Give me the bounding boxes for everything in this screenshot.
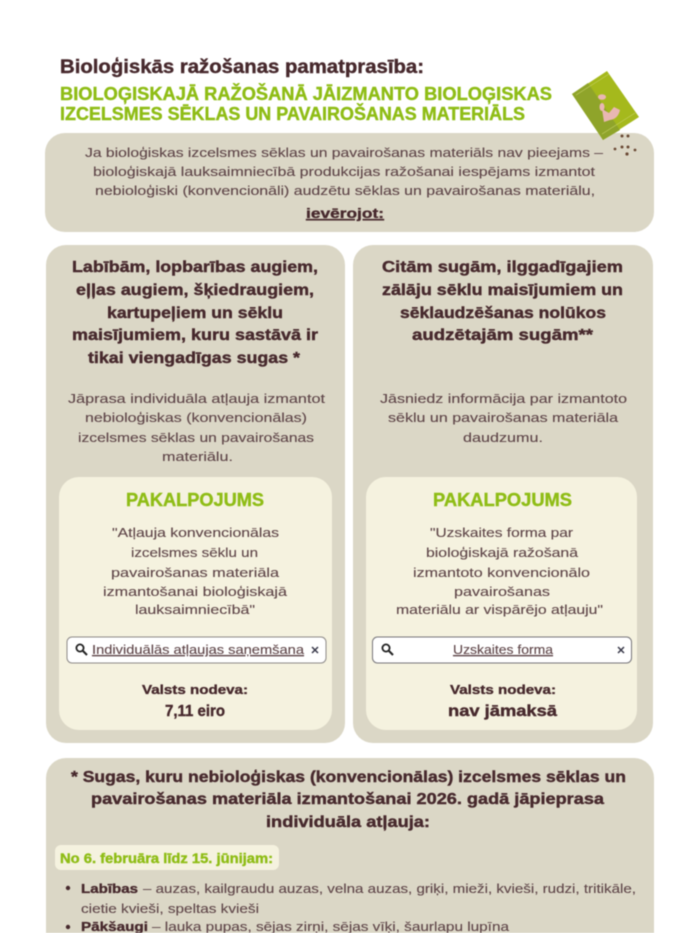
service name: lauksaimniecībā" xyxy=(135,602,255,617)
state fee: right: Valsts nodeva: xyxy=(450,682,556,697)
text: right column requirement: daudzumu. xyxy=(463,430,543,445)
service name: "Uzskaites forma par xyxy=(430,525,574,540)
search box: record form xyxy=(372,637,632,663)
state fee: left xyxy=(142,682,248,720)
heading: left column xyxy=(72,259,318,367)
heading: species: * Sugas, kuru nebioloģiskas (konvencionālas) izcelsmes sēklas un xyxy=(71,769,626,786)
heading: right column: sēklaudzēšanas nolūkos xyxy=(400,305,606,322)
icon: seed packet xyxy=(572,71,639,156)
state fee: right: nav jāmaksā xyxy=(448,703,557,720)
panel: intro: Ja bioloģiskas izcelsmes sēklas un pavairošanas materiāls nav pieejams – xyxy=(85,145,604,160)
search box: record form: Uzskaites forma xyxy=(453,642,554,657)
panel: right column xyxy=(353,245,653,743)
service name: izmantošanai bioloģiskajā xyxy=(103,584,288,599)
service name: pavairošanas materiāla xyxy=(111,565,280,580)
text: left column requirement: Jāprasa individuāla atļauja izmantot xyxy=(68,391,325,406)
search box: individual permit: Individuālās atļaujas saņemšana xyxy=(92,642,305,657)
panel: intro xyxy=(45,133,654,232)
card: left service xyxy=(59,477,332,730)
panel: left column xyxy=(46,245,345,743)
state fee: left: Valsts nodeva: xyxy=(142,682,248,697)
service name xyxy=(396,525,603,617)
heading: species: pavairošanas materiāla izmantošanai 2026. gadā jāpieprasa xyxy=(91,791,604,808)
service label: PAKALPOJUMS xyxy=(433,490,572,510)
state fee: right xyxy=(448,682,557,720)
page title: Bioloģiskās ražošanas pamatprasība: xyxy=(60,57,424,78)
heading: left column: Labībām, lopbarības augiem, xyxy=(72,259,318,276)
service name xyxy=(103,525,288,617)
panel: species list xyxy=(46,758,654,933)
bullet: legumes xyxy=(66,919,510,933)
service name: pavairošanas xyxy=(454,584,551,599)
service label: PAKALPOJUMS xyxy=(126,490,264,510)
green heading: IZCELSMES SĒKLAS UN PAVAIROŠANAS MATERIĀLS xyxy=(60,103,525,124)
date label: No 6. februāra līdz 15. jūnijam: xyxy=(60,851,273,866)
service name: izcelsmes sēklu un xyxy=(131,545,258,560)
text: left column requirement xyxy=(68,391,325,464)
date label xyxy=(55,845,279,870)
service name: "Atļauja konvencionālas xyxy=(112,525,280,540)
text: right column requirement: Jāsniedz informācija par izmantoto xyxy=(380,391,627,406)
green heading xyxy=(60,83,552,124)
bullet: cereals: Labības xyxy=(81,881,138,896)
bullet: cereals: cietie kvieši, speltas kvieši xyxy=(81,901,259,916)
card: right service xyxy=(366,477,637,730)
heading: right column: Citām sugām, ilggadīgajiem xyxy=(382,259,623,276)
heading: right column: audzētajām sugām** xyxy=(412,327,594,344)
text: left column requirement: nebioloģiskas (konvencionālas) xyxy=(85,410,307,425)
heading: left column: kartupeļiem un sēklu xyxy=(107,305,283,322)
green heading: BIOLOĢISKAJĀ RAŽOŠANĀ JĀIZMANTO BIOLOĢISKAS xyxy=(60,83,552,104)
bullet: cereals: – auzas, kailgraudu auzas, velna auzas, griķi, mieži, kvieši, rudzi, tritikāle, xyxy=(143,881,636,896)
heading: right column: zālāju sēklu maisījumiem un xyxy=(382,282,623,299)
heading: left column: maisījumiem, kuru sastāvā ir xyxy=(72,327,318,344)
search box: individual permit xyxy=(67,637,326,663)
heading: species: individuāla atļauja: xyxy=(266,814,430,831)
service name: bioloģiskajā ražošanā xyxy=(426,545,579,560)
service name: izmantoto konvencionālo xyxy=(413,565,590,580)
text: right column requirement: sēklu un pavairošanas materiāla xyxy=(388,410,619,425)
panel: intro: bioloģiskajā lauksaimniecībā produkcijas ražošanai iespējams izmantot xyxy=(93,164,595,179)
heading: left column: tikai viengadīgas sugas * xyxy=(88,350,301,367)
text: left column requirement: izcelsmes sēklas un pavairošanas xyxy=(78,430,315,445)
heading: right column xyxy=(382,259,623,344)
text: right column requirement xyxy=(380,391,627,445)
text: left column requirement: materiālu. xyxy=(162,449,233,464)
bullet: cereals xyxy=(66,881,636,916)
panel: intro: nebioloģiski (konvencionāli) audzētu sēklas un pavairošanas materiālu, xyxy=(95,183,595,198)
heading: left column: eļļas augiem, šķiedraugiem, xyxy=(76,282,314,299)
heading: species xyxy=(71,769,626,831)
state fee: left: 7,11 eiro xyxy=(165,703,225,720)
service name: materiālu ar vispārējo atļauju" xyxy=(396,602,603,617)
panel: intro: ievērojot: xyxy=(306,205,384,221)
